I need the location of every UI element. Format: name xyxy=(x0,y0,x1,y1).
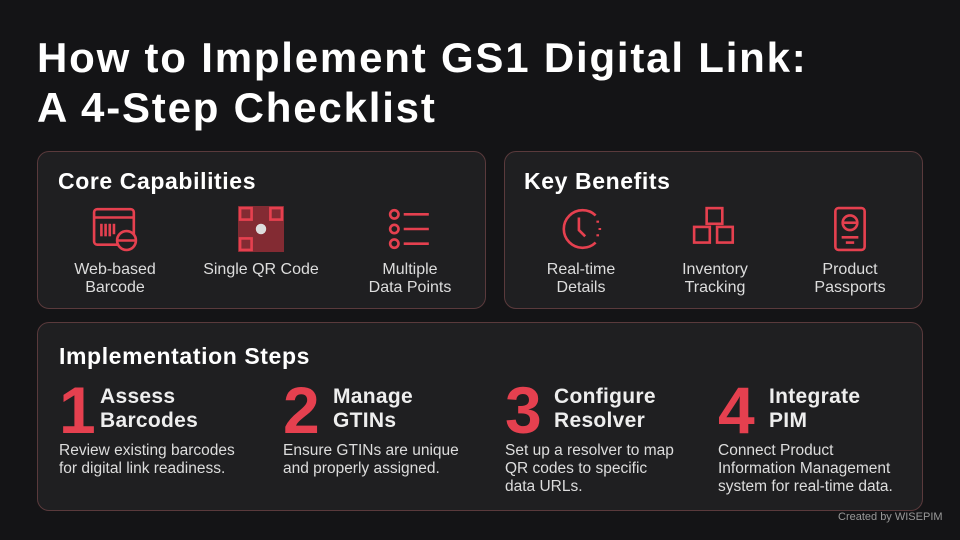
item: single QR code xyxy=(203,206,319,278)
text: QR codes to specific xyxy=(505,460,647,477)
text: PIM xyxy=(769,409,807,432)
text: Integrate xyxy=(769,385,860,408)
text: Connect Product xyxy=(718,442,833,459)
step 3 xyxy=(505,373,674,495)
item: multiple data points xyxy=(369,208,451,296)
item: multiple data points: Data Points xyxy=(369,279,451,296)
text: Review existing barcodes xyxy=(59,442,235,459)
item: inventory tracking: Inventory xyxy=(682,261,748,278)
text: 4 xyxy=(718,373,755,447)
text: GTINs xyxy=(333,409,396,432)
text: and properly assigned. xyxy=(283,460,440,477)
panel: key benefits xyxy=(504,151,923,309)
panel: implementation steps xyxy=(37,322,923,511)
footer credit: Created by WISEPIM xyxy=(838,511,943,523)
text: 1 xyxy=(59,373,96,447)
item: product passports: Passports xyxy=(814,279,886,296)
text: system for real-time data. xyxy=(718,478,893,495)
text: for digital link readiness. xyxy=(59,460,225,477)
item: real-time details xyxy=(547,208,615,296)
item: product passports xyxy=(814,206,886,296)
text: Assess xyxy=(100,385,175,408)
heading: key benefits: Key Benefits xyxy=(524,168,671,194)
title xyxy=(37,34,808,131)
text: Resolver xyxy=(554,409,645,432)
text: 3 xyxy=(505,373,542,447)
text: data URLs. xyxy=(505,478,583,495)
heading: implementation steps: Implementation Steps xyxy=(59,343,310,369)
heading: core capabilities: Core Capabilities xyxy=(58,168,256,194)
item: real-time details: Details xyxy=(557,279,605,296)
text: Barcodes xyxy=(100,409,198,432)
item: web-based barcode xyxy=(74,208,156,296)
step 4 xyxy=(718,373,893,495)
text: 2 xyxy=(283,373,320,447)
item: multiple data points: Multiple xyxy=(382,261,438,278)
text: Information Management xyxy=(718,460,890,477)
item: real-time details: Real-time xyxy=(547,261,615,278)
item: inventory tracking xyxy=(682,206,748,296)
step 1 xyxy=(59,373,235,477)
step 2 xyxy=(283,373,459,477)
item: product passports: Product xyxy=(822,261,878,278)
item: web-based barcode: Barcode xyxy=(85,279,145,296)
item: inventory tracking: Tracking xyxy=(685,279,745,296)
title: How to Implement GS1 Digital Link: xyxy=(37,34,808,81)
panel: core capabilities xyxy=(37,151,486,309)
title: A 4-Step Checklist xyxy=(37,84,437,131)
text: Configure xyxy=(554,385,656,408)
text: Manage xyxy=(333,385,413,408)
text: Ensure GTINs are unique xyxy=(283,442,459,459)
text: Set up a resolver to map xyxy=(505,442,674,459)
item: web-based barcode: Web-based xyxy=(74,261,156,278)
item: single QR code: Single QR Code xyxy=(203,261,319,278)
